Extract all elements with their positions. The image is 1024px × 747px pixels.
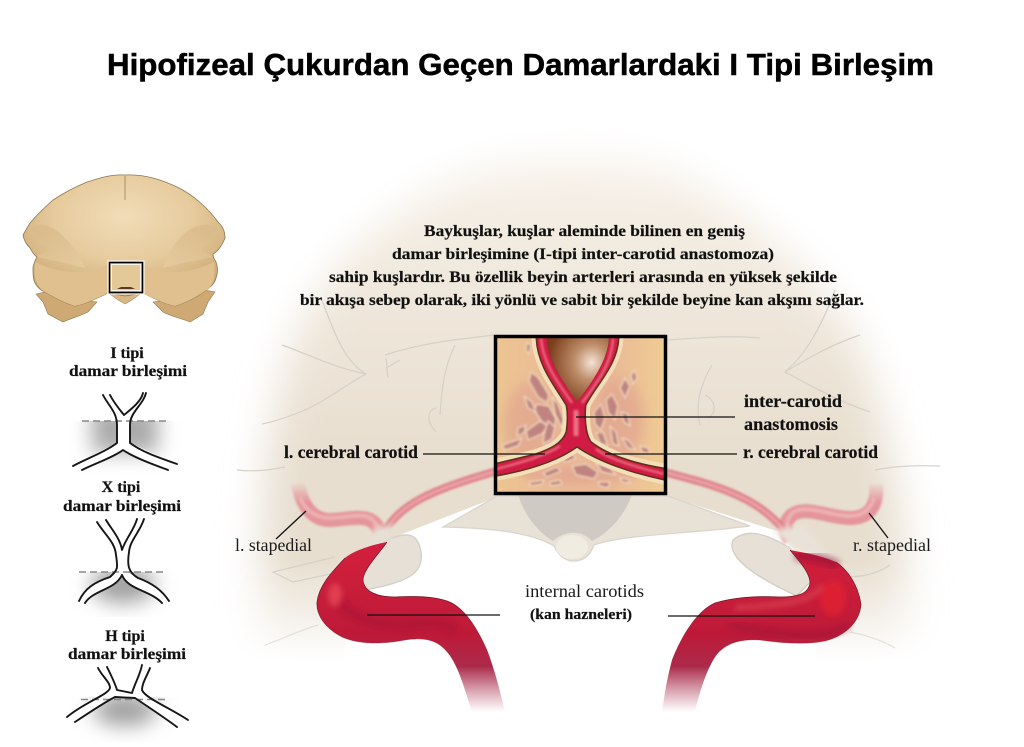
- skull icon: [23, 175, 225, 322]
- label: l. stapedial: l. stapedial: [235, 535, 312, 555]
- label: r. stapedial: r. stapedial: [853, 535, 931, 555]
- paragraph: damar birleşimine (I-tipi inter-carotid anastomoza): [392, 246, 774, 263]
- spongy bone: [503, 342, 650, 488]
- label: kan hazneleri: (kan hazneleri): [530, 607, 632, 623]
- vessels red: [497, 338, 664, 479]
- paragraph: Baykuşlar, kuşlar aleminde bilinen en geniş: [424, 223, 745, 240]
- right lobe: [732, 533, 812, 596]
- lower fade of wash: [250, 578, 919, 678]
- diagram heading: H tipi: H tipi: [105, 628, 145, 645]
- label: inter-carotid anastomosis: [744, 391, 842, 434]
- label: r. cerebral carotid: r. cerebral carotid: [743, 442, 878, 462]
- paragraph: bir akışa sebep olarak, iki yönlü ve sabit bir şekilde beyine kan akşını sağlar.: [300, 292, 864, 309]
- paragraph: [300, 223, 864, 309]
- diagram: H type: [67, 665, 188, 727]
- label: l. cerebral carotid: l. cerebral carotid: [284, 442, 418, 462]
- plate fade right: [773, 525, 835, 562]
- plate fade over arteries: [360, 525, 400, 555]
- title: Hipofizeal Çukurdan Geçen Damarlardaki I Tipi Birleşim: [107, 47, 934, 82]
- artery: right stapedial and cerebral carotid: [664, 472, 876, 540]
- vessel highlights: [497, 338, 664, 474]
- leader lines: [276, 417, 888, 616]
- diagram heading: X tipi: damar birleşimi: [63, 498, 182, 515]
- artery: left stapedial and cerebral carotid: [298, 471, 497, 532]
- beige skull wash: [243, 155, 924, 650]
- label: internal carotids: internal carotids: [525, 581, 644, 601]
- nodule: [556, 535, 588, 559]
- label: inter-carotid anastomosis: inter-carotid: [744, 391, 842, 411]
- diagram heading: X tipi: [63, 479, 182, 515]
- diagram heading: H tipi: damar birleşimi: [68, 646, 187, 663]
- diagram: X type: [79, 519, 169, 603]
- cranium: [23, 175, 225, 306]
- lower jaw pieces: [36, 292, 97, 322]
- diagram: I type: [73, 393, 177, 470]
- pink haze: [502, 383, 552, 454]
- diagram heading: H tipi: [68, 628, 187, 663]
- diagram heading: I tipi: I tipi: [110, 345, 144, 362]
- left lobe: [360, 535, 421, 590]
- label: inter-carotid anastomosis: anastomosis: [744, 414, 838, 434]
- diagram heading: I tipi: damar birleşimi: [69, 363, 188, 380]
- vessel outer lining and wall: [497, 338, 664, 479]
- grey pouch: [518, 494, 632, 541]
- paragraph: sahip kuşlardır. Bu özellik beyin arterleri arasında en yüksek şekilde: [329, 269, 837, 286]
- inset: anastomosis close-up: [496, 336, 666, 494]
- ear panels: [30, 225, 85, 268]
- artery: left internal carotid: [317, 542, 505, 712]
- diagram heading: I tipi: [69, 345, 188, 380]
- square marker: [110, 262, 142, 292]
- bone lines: [237, 290, 940, 648]
- skull background illustration: [237, 155, 940, 650]
- sella: [547, 336, 609, 402]
- artery: right internal carotid: [662, 550, 861, 712]
- central bone under inset: [443, 496, 750, 561]
- diagram heading: X tipi: X tipi: [102, 479, 141, 496]
- lower band: [35, 262, 108, 306]
